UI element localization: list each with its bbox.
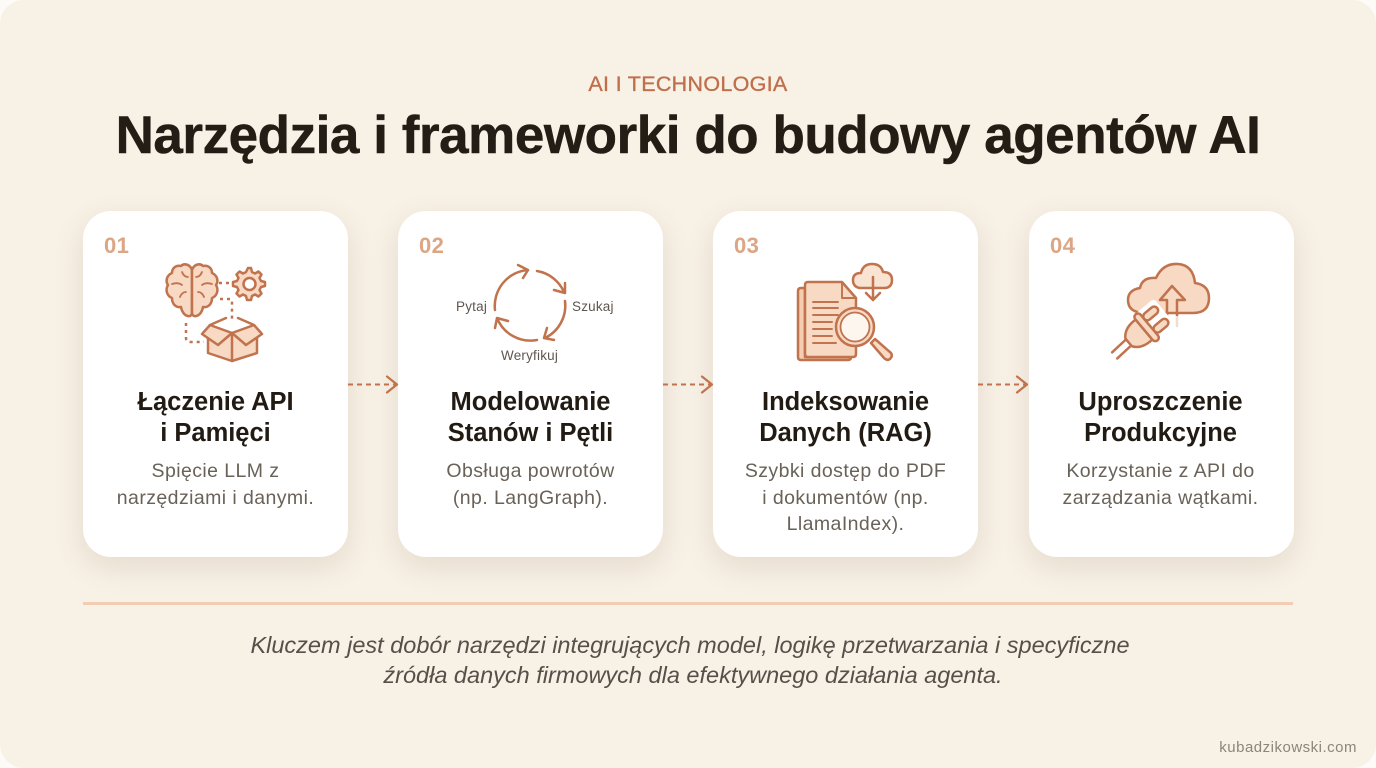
arrow: card 2 to 3 [663, 375, 714, 394]
number 02: 02 [419, 233, 444, 258]
closing statement [250, 632, 1130, 688]
card 4: production simplification [1029, 211, 1294, 557]
cycle labels [456, 299, 614, 363]
card 2: state modelling [398, 211, 663, 557]
card 3 heading: Danych (RAG) [759, 419, 932, 447]
card 4 description: zarządzania wątkami. [1063, 486, 1258, 508]
eyebrow label: AI I TECHNOLOGIA [588, 72, 788, 96]
card 1 heading [137, 388, 294, 447]
card 3: data indexing [713, 211, 978, 557]
arrow: card 1 to 2 [348, 375, 398, 394]
card 1 description: Spięcie LLM z [152, 460, 279, 482]
card 2 heading: Modelowanie [451, 388, 610, 416]
card 3 description: i dokumentów (np. [762, 486, 929, 508]
number 01: 01 [104, 233, 129, 258]
number 03: 03 [734, 233, 759, 258]
icon: loop cycle [456, 264, 614, 363]
card 1 description [117, 460, 314, 508]
card 3 description [745, 460, 946, 535]
closing statement: źródła danych firmowych dla efektywnego działania agenta. [383, 662, 1003, 688]
cycle labels: Szukaj [572, 299, 614, 314]
card 3 description: Szybki dostęp do PDF [745, 460, 946, 482]
card 4 description: Korzystanie z API do [1066, 460, 1255, 482]
card 2 description: (np. LangGraph). [453, 486, 608, 508]
number 04: 04 [1050, 233, 1075, 258]
card 1 description: narzędziami i danymi. [117, 486, 314, 508]
card 4 heading [1078, 388, 1243, 447]
card 3 heading: Indeksowanie [762, 388, 929, 416]
card 3 description: LlamaIndex). [787, 513, 904, 535]
icon: documents, magnifier and cloud [796, 262, 894, 362]
card 2 description [446, 460, 615, 508]
card 1 heading: i Pamięci [160, 419, 271, 447]
card 4 heading: Produkcyjne [1084, 419, 1237, 447]
cycle labels: Weryfikuj [501, 348, 558, 363]
card 1: API and memory [83, 211, 348, 557]
title: Narzędzia i frameworki do budowy agentów AI [116, 106, 1260, 164]
closing statement: Kluczem jest dobór narzędzi integrujących model, logikę przetwarzania i specyficzne [250, 632, 1130, 658]
card 4 description [1063, 460, 1258, 508]
cycle labels: Pytaj [456, 299, 487, 314]
icon: plug and cloud [1110, 262, 1210, 360]
card 2 heading [448, 388, 613, 447]
card 2 description: Obsługa powrotów [446, 460, 615, 482]
arrow: card 3 to 4 [978, 375, 1028, 394]
card 2 heading: Stanów i Pętli [448, 419, 613, 447]
icon: brain, gear and box [165, 263, 266, 362]
card 4 heading: Uproszczenie [1078, 388, 1243, 416]
footer credit: kubadzikowski.com [1219, 739, 1357, 756]
card 3 heading [759, 388, 932, 447]
card 1 heading: Łączenie API [137, 388, 294, 416]
